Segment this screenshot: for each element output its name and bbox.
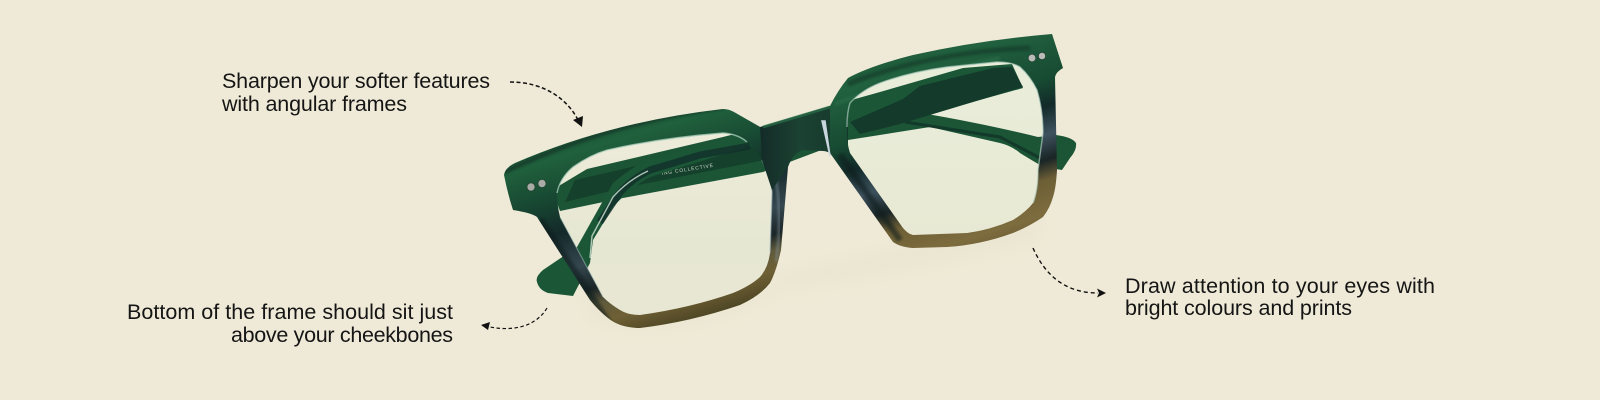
soft shadow under glasses: [580, 210, 1040, 328]
callout text: angular frames: Sharpen your softer features: [222, 69, 490, 93]
callout text: cheekbones: above your cheekbones: [231, 323, 453, 347]
callout text: angular frames: [221, 69, 490, 116]
arrow: to bottom of frame: [481, 308, 547, 330]
engraved temple text: size: A C4 51▢20-145: [852, 99, 907, 121]
arrow: from frame colour to callout: [1033, 248, 1106, 298]
engraved temple text: brand: ING COLLECTIVE: [661, 163, 714, 177]
callout text: colours and prints: Draw attention to your eyes with: [1125, 274, 1435, 298]
callout text: angular frames: with angular frames: [221, 92, 407, 116]
callout text: cheekbones: Bottom of the frame should sit just: [127, 300, 453, 324]
right rivets: [1028, 52, 1046, 62]
temple arm hinged right, tip at lower left: [537, 64, 1023, 296]
callout text: cheekbones: [127, 300, 453, 347]
callout text: colours and prints: [1125, 274, 1435, 320]
front frame: right rim and bridge: [760, 34, 1063, 248]
left lens tint: [557, 133, 772, 315]
temple arm hinged left, tip at right: [552, 99, 1076, 211]
arrow: to top of frame: [510, 82, 583, 127]
glasses photo illustration: [504, 34, 1076, 328]
right lens tint: [847, 62, 1043, 235]
callout text: colours and prints: bright colours and prints: [1125, 296, 1352, 320]
left rivets: [527, 180, 546, 191]
front frame: left rim: [504, 107, 790, 328]
